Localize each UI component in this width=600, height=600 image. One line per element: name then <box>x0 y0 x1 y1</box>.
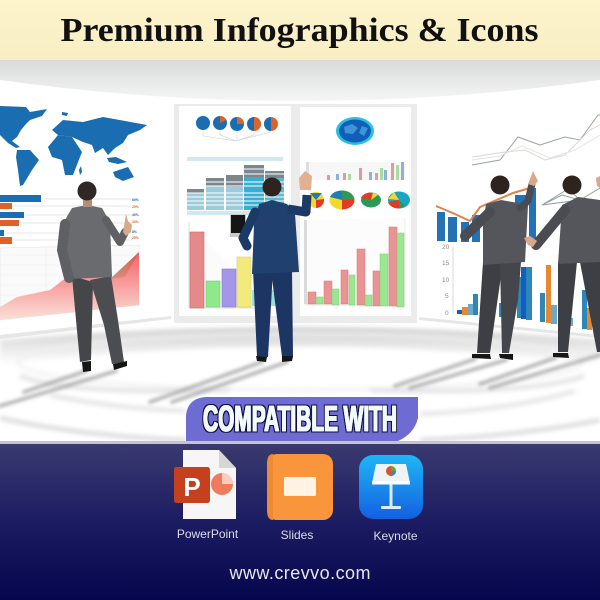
pie row <box>308 190 410 210</box>
label: Slides: Slides <box>281 528 313 542</box>
paired bar chart <box>304 218 405 307</box>
world map <box>0 106 147 186</box>
small bar chart <box>306 162 405 180</box>
website address: www.crevvo.com <box>228 563 370 583</box>
area chart <box>0 245 139 320</box>
segmented column chart <box>187 157 284 215</box>
horizontal bar chart: 40% <box>132 213 139 217</box>
label: PowerPoint: PowerPoint <box>177 527 239 541</box>
panel: world map screen <box>0 85 171 339</box>
grouped bar chart: 15 <box>442 260 450 267</box>
room background <box>0 60 600 445</box>
label: Keynote: Keynote <box>373 529 418 543</box>
title: Premium Infographics & Icons <box>60 12 538 49</box>
grouped bar chart <box>442 244 592 330</box>
title bar <box>0 0 600 60</box>
grouped bar chart: 10 <box>442 277 450 284</box>
horizontal bar chart: 60% <box>132 198 139 202</box>
globe <box>336 117 374 145</box>
figure: man in navy suit <box>243 171 312 362</box>
panel: column charts screen <box>174 104 296 323</box>
icon: PowerPoint: P <box>183 472 201 502</box>
panel: analytics screen <box>419 83 600 338</box>
combo column chart <box>436 188 600 243</box>
floor shadows of the figures <box>0 355 600 406</box>
grouped bar chart: 5 <box>445 293 449 300</box>
horizontal bar chart: 8% <box>132 230 137 234</box>
laptop <box>230 214 246 237</box>
icon: Keynote <box>359 455 423 519</box>
horizontal bar chart: 30% <box>132 220 139 224</box>
3D bar chart <box>189 222 278 308</box>
line chart <box>472 115 600 165</box>
figure: man in grey suit <box>62 182 132 372</box>
panel: pies and bars screen <box>296 104 417 323</box>
banner: compatible with <box>186 397 418 441</box>
figure: man in dark suit at right <box>524 176 600 358</box>
bottom navy panel <box>0 441 600 600</box>
horizontal bar chart <box>0 195 139 244</box>
icon: Slides <box>267 454 333 520</box>
horizontal bar chart: 20% <box>132 236 139 240</box>
banner: compatible with: COMPATIBLE WITH <box>203 398 397 439</box>
icon: PowerPoint <box>174 450 236 519</box>
floor rings <box>0 334 600 440</box>
grouped bar chart: 20 <box>442 244 450 251</box>
horizontal bar chart: 20% <box>132 205 139 209</box>
figure: man in dark suit reaching up <box>465 171 538 360</box>
grouped bar chart: 0 <box>445 310 449 317</box>
pie row <box>196 116 278 141</box>
